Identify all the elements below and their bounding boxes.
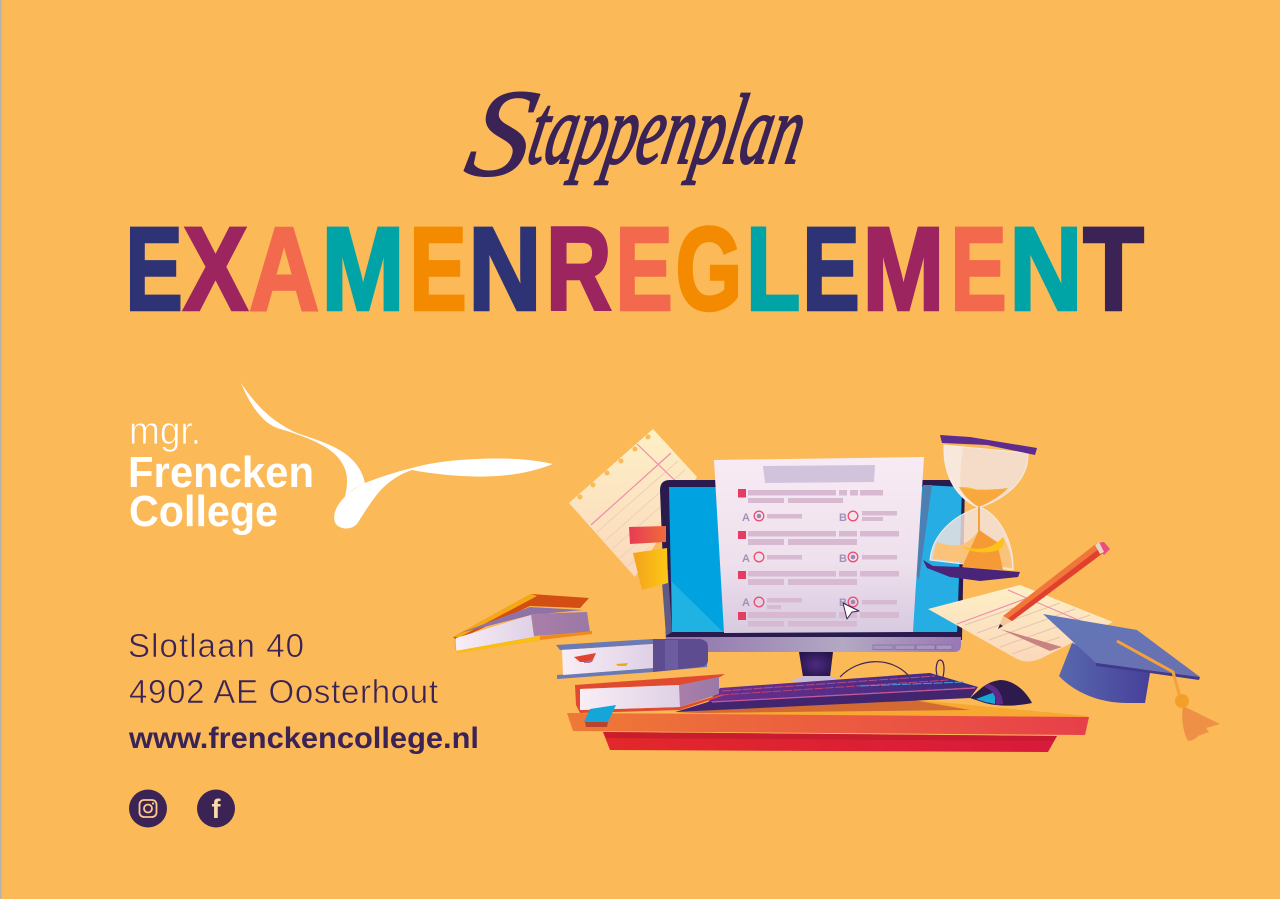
main title: EXAMENREGLEMENT: N xyxy=(1009,204,1082,335)
main title: EXAMENREGLEMENT: N xyxy=(468,204,541,335)
logo: seagull mark xyxy=(241,383,553,528)
main title: EXAMENREGLEMENT: A xyxy=(249,202,319,335)
bookmark xyxy=(584,705,616,727)
exam sheet: A xyxy=(742,512,750,524)
tassel xyxy=(1117,641,1220,741)
main title: EXAMENREGLEMENT xyxy=(126,202,1144,336)
note paper under pencil xyxy=(928,585,1113,662)
icon: facebook xyxy=(197,790,235,828)
monitor chin xyxy=(666,637,961,652)
exam sheet: B xyxy=(839,553,847,565)
sticky tabs xyxy=(629,526,668,590)
main title: EXAMENREGLEMENT: T xyxy=(1083,203,1144,335)
exam sheet: A xyxy=(742,553,750,565)
computer mouse xyxy=(970,680,1032,706)
hourglass xyxy=(923,435,1037,581)
keyboard xyxy=(675,660,978,712)
exam sheet: A xyxy=(742,597,750,609)
main title: EXAMENREGLEMENT: R xyxy=(546,204,611,335)
keyboard cable xyxy=(840,660,944,677)
book: middle xyxy=(556,639,708,679)
main title: EXAMENREGLEMENT: X xyxy=(184,203,247,335)
exam sheet: B xyxy=(839,512,847,524)
main title: EXAMENREGLEMENT: E xyxy=(126,203,183,335)
website: www.frenckencollege.nl xyxy=(128,722,479,755)
main title: EXAMENREGLEMENT: E xyxy=(616,203,673,335)
logo text: mgr.: mgr. xyxy=(129,410,201,453)
main title: EXAMENREGLEMENT: M xyxy=(863,203,944,335)
main title: EXAMENREGLEMENT: L xyxy=(746,204,800,336)
exam sheet: B xyxy=(839,597,847,609)
address block xyxy=(128,627,479,755)
book: open tilted xyxy=(453,594,592,653)
main title: EXAMENREGLEMENT: G xyxy=(676,203,742,335)
icon: instagram xyxy=(129,790,167,828)
book: bottom xyxy=(575,674,725,727)
graduation cap xyxy=(1043,614,1220,741)
street address: Slotlaan 40 xyxy=(128,627,304,664)
script heading: Stappenplan xyxy=(456,64,816,203)
script heading: Stappenplan: S xyxy=(456,64,548,203)
desk xyxy=(567,700,1089,752)
main title: EXAMENREGLEMENT: M xyxy=(322,203,404,335)
postcode and city: 4902 AE Oosterhout xyxy=(129,673,438,710)
monitor xyxy=(660,480,965,681)
exam sheet xyxy=(714,457,924,633)
logo text: Frencken: Frencken xyxy=(128,448,314,497)
logo text: College: College xyxy=(129,487,278,536)
main title: EXAMENREGLEMENT: E xyxy=(951,202,1006,335)
main title: EXAMENREGLEMENT: E xyxy=(410,203,467,335)
illustration: exam desk scene xyxy=(453,429,1220,752)
script heading: Stappenplan: tappenplan xyxy=(520,74,816,185)
note paper behind monitor xyxy=(569,429,697,577)
main title: EXAMENREGLEMENT: E xyxy=(802,203,860,335)
monitor stand xyxy=(799,652,833,677)
icon: cursor arrow xyxy=(843,603,859,619)
school logo xyxy=(128,383,553,536)
icon: facebook: f xyxy=(212,794,222,824)
pencil xyxy=(998,542,1110,629)
